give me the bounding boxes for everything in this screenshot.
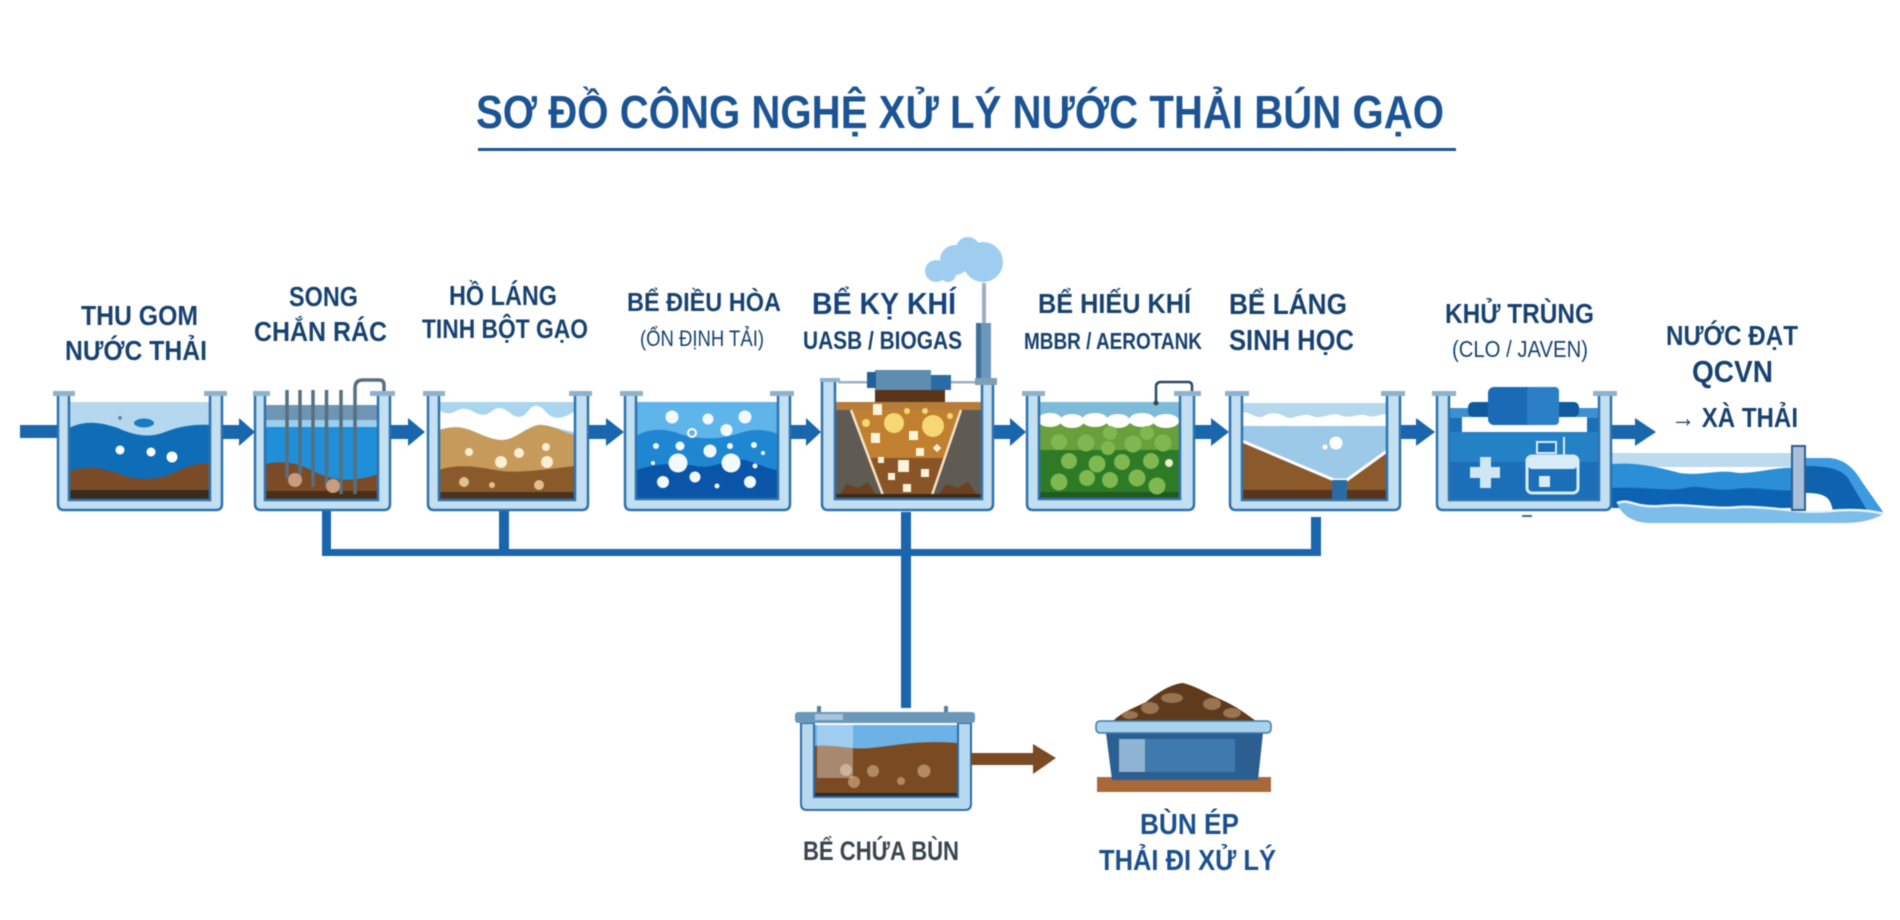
- tank 7: biological settling: [1225, 391, 1405, 510]
- label: tank 7: SINH HỌC: [1229, 325, 1354, 357]
- sludge collection pipes: [322, 510, 1321, 708]
- label: tank 5: [803, 286, 962, 355]
- label: tank 3: TINH BỘT GẠO: [422, 313, 588, 344]
- arrow: tank 1 to tank 2: [222, 418, 255, 446]
- label: tank 3: [422, 280, 588, 344]
- label: pressed sludge: THẢI ĐI XỬ LÝ: [1099, 843, 1276, 877]
- tank 4: equalization: [620, 391, 794, 510]
- label: tank 4: [627, 287, 781, 351]
- discharge water and outlet pipe: [1612, 446, 1884, 523]
- label: tank 5: UASB / BIOGAS: [803, 327, 962, 355]
- label: tank 7: [1229, 287, 1354, 357]
- label: tank 1: THU GOM: [81, 300, 198, 331]
- arrow: tank 4 to tank 5: [790, 418, 821, 446]
- tank 1: collection: [53, 391, 227, 510]
- label: tank 8: KHỬ TRÙNG: [1445, 297, 1594, 329]
- tank 5: anaerobic UASB: [820, 370, 993, 510]
- label: tank 2: [254, 281, 387, 347]
- label: tank 6: [1024, 288, 1202, 354]
- arrow: tank 7 to tank 8: [1400, 418, 1435, 446]
- label: tank 7: BỂ LÁNG: [1229, 287, 1347, 321]
- sludge holding tank: [795, 706, 975, 810]
- inlet pipe: [20, 425, 58, 438]
- label: tank 8: [1445, 297, 1594, 362]
- label: discharge: [1666, 320, 1798, 433]
- label: tank 6: MBBR / AEROTANK: [1024, 328, 1202, 354]
- arrow: tank 6 to tank 7: [1194, 418, 1229, 446]
- label: discharge: NƯỚC ĐẠT: [1666, 320, 1798, 351]
- label: tank 4: BỂ ĐIỀU HÒA: [627, 287, 781, 317]
- label: tank 1: [65, 300, 207, 366]
- tank 6: aerobic MBBR: [1022, 382, 1201, 510]
- biogas chimney and cloud: [925, 237, 1003, 385]
- label: pressed sludge: BÙN ÉP: [1140, 807, 1239, 841]
- tank 2: screen: [253, 380, 395, 510]
- label: tank 3: HỒ LÁNG: [449, 280, 557, 311]
- label: pressed sludge: [1099, 807, 1276, 877]
- tank 3: starch settling pond: [423, 391, 592, 510]
- label: tank 2: SONG: [289, 281, 358, 312]
- arrow: tank 8 to discharge: [1611, 418, 1656, 446]
- tank 8: disinfection: [1432, 387, 1617, 517]
- arrow: sludge to press: [971, 744, 1056, 774]
- label: tank 4: (ỔN ĐỊNH TẢI): [640, 326, 764, 351]
- label: discharge: QCVN: [1692, 354, 1773, 389]
- label: tank 8: (CLO / JAVEN): [1452, 336, 1588, 362]
- label: tank 6: BỂ HIẾU KHÍ: [1038, 288, 1192, 319]
- arrow: tank 2 to tank 3: [390, 418, 425, 446]
- label: tank 1: NƯỚC THẢI: [65, 334, 207, 366]
- label: discharge: → XÀ THẢI: [1671, 401, 1798, 433]
- arrow: tank 5 to tank 6: [993, 418, 1026, 446]
- arrow: tank 3 to tank 4: [588, 418, 624, 446]
- label: tank 2: CHẮN RÁC: [254, 316, 387, 347]
- pressed sludge tray: [1096, 683, 1271, 792]
- label: tank 5: BỂ KỴ KHÍ: [812, 286, 957, 321]
- title: SƠ ĐỒ CÔNG NGHỆ XỬ LÝ NƯỚC THẢI BÚN GẠO: [476, 86, 1444, 138]
- label: sludge holding tank: BỂ CHỨA BÙN: [803, 835, 959, 866]
